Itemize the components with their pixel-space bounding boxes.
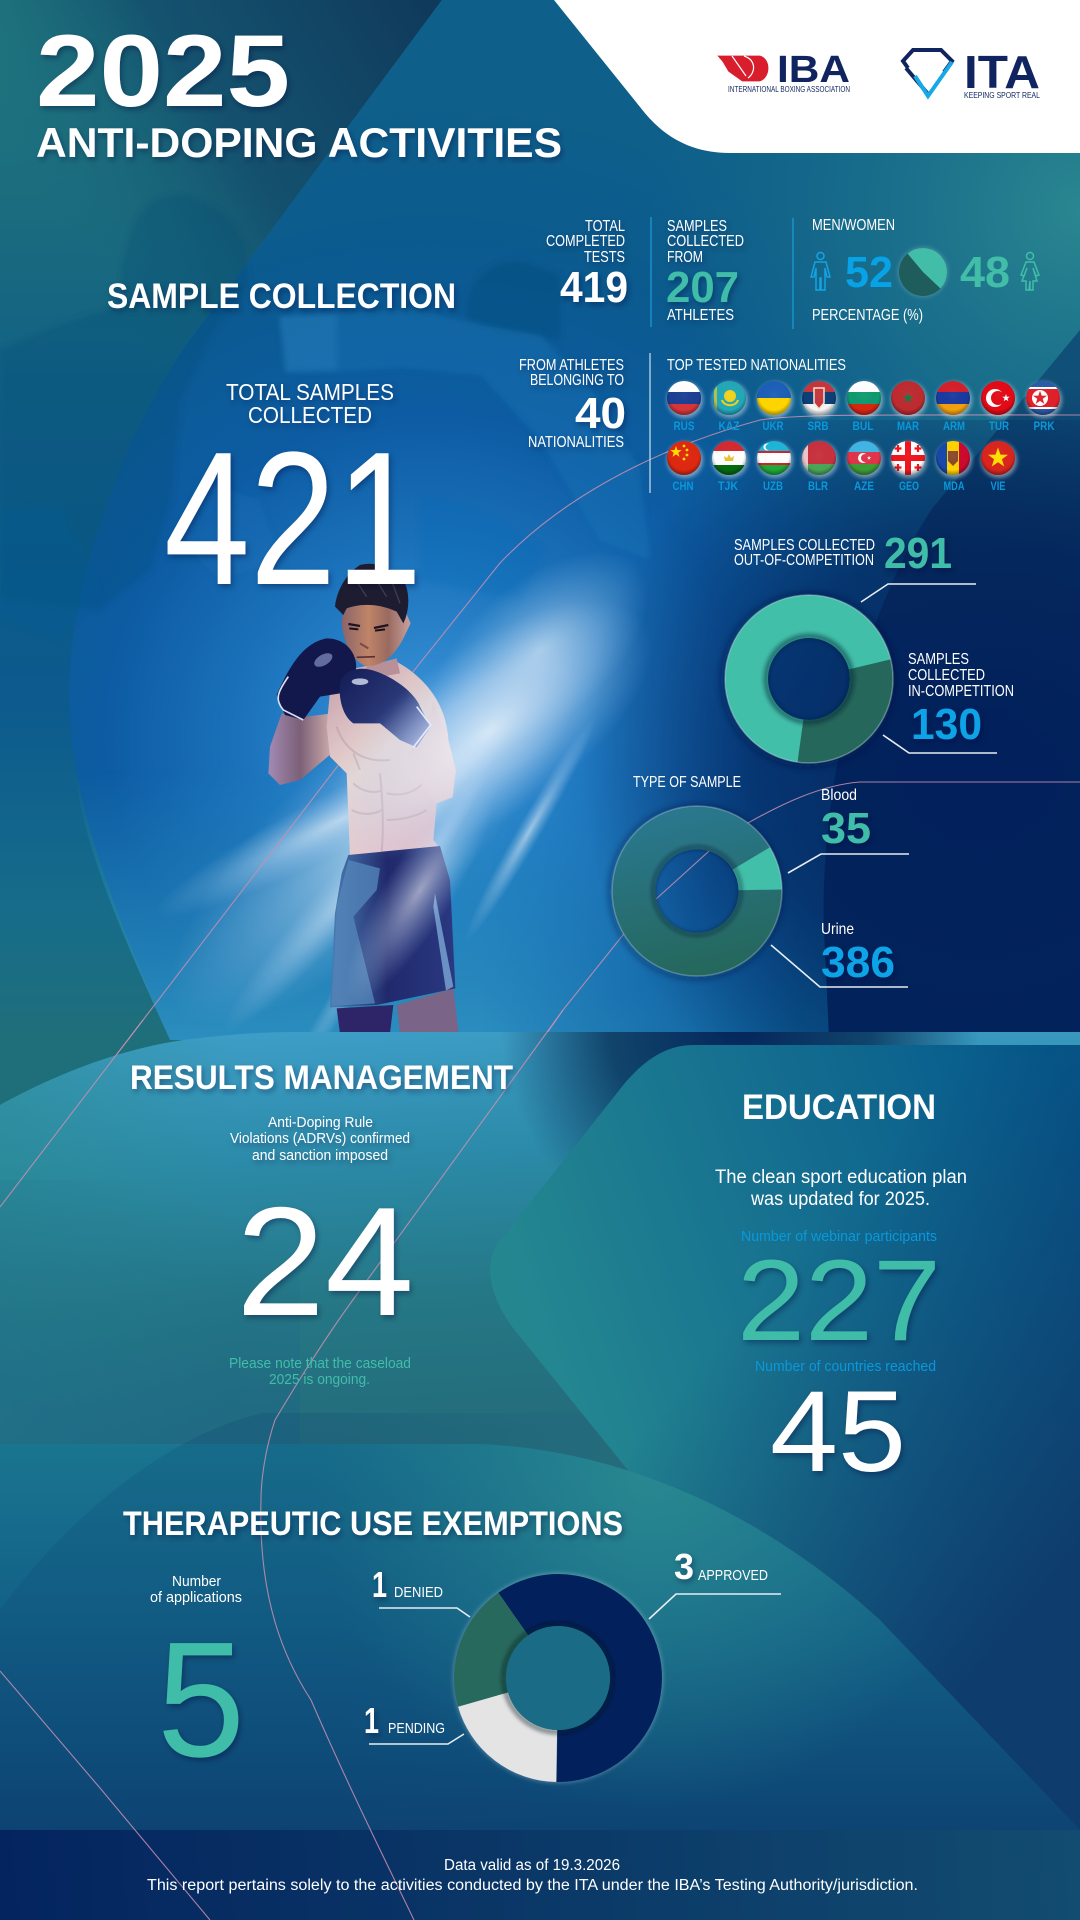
flag codes row two: TJK [718,479,738,493]
title year: 2025 [36,14,290,128]
panel: top tested nationalities [667,357,1062,493]
flag: Morocco [891,381,925,415]
label: urine: Urine [821,921,854,938]
label: approved [649,1546,781,1619]
stat: total samples collected: COLLECTED [248,402,372,428]
label: in competition: IN-COMPETITION [908,683,1014,700]
flag codes row one: MAR [897,419,919,433]
flag codes row one: BUL [852,419,874,433]
panel: top tested nationalities: TOP TESTED NATIONALITIES [667,357,846,374]
footer text [147,1857,918,1894]
label: in competition: 130 [911,700,982,749]
footer text: This report pertains solely to the activities conducted by the ITA under the IBA’s Testing Authority/jurisdiction. [147,1877,918,1894]
flag halos [667,382,1062,478]
icon: IBA glove mark [716,55,769,82]
label: approved: 3 [674,1546,694,1587]
divider [649,353,651,493]
label: pending [364,1700,464,1744]
text: anti-doping rule violations: and sanction imposed [252,1147,388,1164]
flag codes row one: PRK [1034,419,1055,433]
stat: total samples collected: 421 [164,413,422,625]
flag: Kazakhstan [712,381,746,415]
stat: samples collected from athletes: SAMPLES [667,218,727,235]
flag: Uzbekistan [757,441,791,475]
stat: athletes nationalities: BELONGING TO [530,372,624,389]
footer text: Data valid as of 19.3.2026 [444,1857,620,1874]
heading: type of sample: TYPE OF SAMPLE [633,774,741,791]
heading: education: EDUCATION [742,1088,936,1127]
flag codes row one [674,419,1055,433]
text: education plan: was updated for 2025. [750,1189,930,1210]
stat: samples collected from athletes: FROM [667,249,703,266]
stat: countries reached [755,1358,936,1496]
divider [792,218,794,329]
central glow over boxer [286,551,694,1018]
panel: men and women percentage: MEN/WOMEN [812,217,895,234]
flag: Moldova [936,441,970,475]
text: anti-doping rule violations [230,1114,410,1164]
flag: Serbia [802,381,836,415]
flag codes row one: SRB [808,419,829,433]
chart: TUE status [449,1569,667,1787]
label: in competition: COLLECTED [908,667,985,684]
label: approved: APPROVED [698,1567,768,1584]
stat: total completed tests: TOTAL [585,218,625,235]
heading: sample collection: SAMPLE COLLECTION [107,277,456,316]
flag: Ukraine [757,381,791,415]
flag: Russia [667,381,701,415]
stat: total completed tests: 419 [560,263,628,312]
background [0,0,1080,1200]
panel: men and women percentage: PERCENTAGE (%) [812,307,923,324]
stat: samples collected from athletes: ATHLETES [667,307,734,324]
women percentage: 48 [960,248,1010,297]
icon: woman [1021,252,1039,290]
chart: type of sample [610,804,784,978]
label: out of competition: SAMPLES COLLECTED [734,537,875,554]
stat: total completed tests: TESTS [584,249,625,266]
stat: number of applications: of applications [150,1589,242,1606]
flag: Belarus [802,441,836,475]
lower pink lines over panels [0,1010,563,1920]
text: education plan [715,1167,967,1210]
label: denied: DENIED [394,1584,443,1601]
flag: Turkey [981,381,1015,415]
note: caseload [229,1355,411,1388]
panel: therapeutic use exemptions background [0,1413,1080,1830]
divider [650,217,652,327]
stat: samples collected from athletes: COLLECTED [667,233,744,250]
logo: ITA [903,46,1040,100]
stat: number of applications: Number [172,1573,221,1590]
stat: webinar participants: 227 [737,1237,941,1365]
chart: men women pie [898,247,948,297]
pink curved lines [0,415,1080,1207]
text: anti-doping rule violations: Anti-Doping Rule [268,1114,373,1131]
label: pending: PENDING [388,1720,445,1737]
logo: ITA: KEEPING SPORT REAL [964,90,1040,100]
label: denied [372,1564,470,1617]
label: out of competition [734,529,976,602]
stat: total completed tests: COMPLETED [546,233,625,250]
heading: results management: RESULTS MANAGEMENT [130,1059,513,1097]
panel: results management background [0,1032,1080,1830]
stat: total completed tests [546,218,628,312]
label: blood: 35 [821,804,871,853]
text: education plan: The clean sport education plan [715,1167,967,1188]
flag codes row one: UKR [762,419,784,433]
label: urine [771,921,908,987]
flag: China [667,441,701,475]
stat: samples collected from athletes [666,218,744,324]
flag: Tajikistan [712,441,746,475]
logo: ITA: ITA [964,46,1040,98]
flag: Bulgaria [847,381,881,415]
label: pending: 1 [364,1700,379,1741]
stat: athletes nationalities: NATIONALITIES [528,434,624,451]
label: out of competition: 291 [884,529,952,578]
flag codes row two: CHN [672,479,694,493]
title subtitle: ANTI-DOPING ACTIVITIES [36,119,562,166]
label: urine: 386 [821,938,895,987]
flag codes row two: VIE [990,479,1006,493]
stat: webinar participants: Number of webinar participants [741,1228,937,1245]
label: in competition: SAMPLES [908,651,969,668]
label: out of competition: OUT-OF-COMPETITION [734,552,874,569]
flag codes row two [672,479,1006,493]
stat: athletes nationalities: 40 [575,389,626,438]
stat: countries reached: Number of countries reached [755,1358,936,1375]
label: denied: 1 [372,1564,387,1605]
flag codes row two: AZE [854,479,874,493]
light rays [117,513,685,1097]
logo: IBA: IBA [777,49,850,91]
stat: countries reached: 45 [770,1368,906,1496]
stat: total samples collected: TOTAL SAMPLES [226,379,394,405]
flag codes row one: TUR [989,419,1009,433]
stat: ADRVs: 24 [236,1175,414,1348]
text: anti-doping rule violations: Violations (ADRVs) confirmed [230,1130,410,1147]
header white corner panel [554,0,1080,153]
men percentage: 52 [845,248,893,297]
logo: IBA [716,49,850,94]
note: caseload: Please note that the caseload [229,1355,411,1372]
flag: Armenia [936,381,970,415]
title [36,14,562,166]
background fighters silhouette [0,196,650,640]
label: blood: Blood [821,787,857,804]
panel: footer band [0,1830,1080,1920]
label: blood [788,787,909,873]
panel: men and women percentage [811,217,1039,324]
panel: education background [490,1045,1080,1840]
note: caseload: 2025 is ongoing. [269,1371,370,1388]
boxer illustration [268,564,459,1033]
flag codes row two: MDA [944,479,965,493]
flag codes row one: ARM [943,419,965,433]
stat: samples collected from athletes: 207 [666,263,739,312]
stat: athletes nationalities [519,357,626,451]
flag codes row one: KAZ [718,419,740,433]
flag: North Korea [1026,381,1060,415]
flag codes row two: BLR [808,479,828,493]
flag codes row one: RUS [674,419,694,433]
logo: IBA: INTERNATIONAL BOXING ASSOCIATION [728,85,850,94]
flag codes row two: UZB [763,479,783,493]
stat: athletes nationalities: FROM ATHLETES [519,357,624,374]
chart: out of competition vs in competition [722,594,894,766]
flag: Azerbaijan [847,441,881,475]
flag codes row two: GEO [899,479,919,493]
label: in competition [883,651,1014,753]
heading: therapeutic use exemptions: THERAPEUTIC USE EXEMPTIONS [123,1505,623,1543]
icon: ITA diamond [903,50,952,96]
icon: man [811,252,830,290]
stat: number of applications: 5 [157,1608,245,1791]
flag: Georgia [891,441,925,475]
flag: Vietnam [981,441,1015,475]
